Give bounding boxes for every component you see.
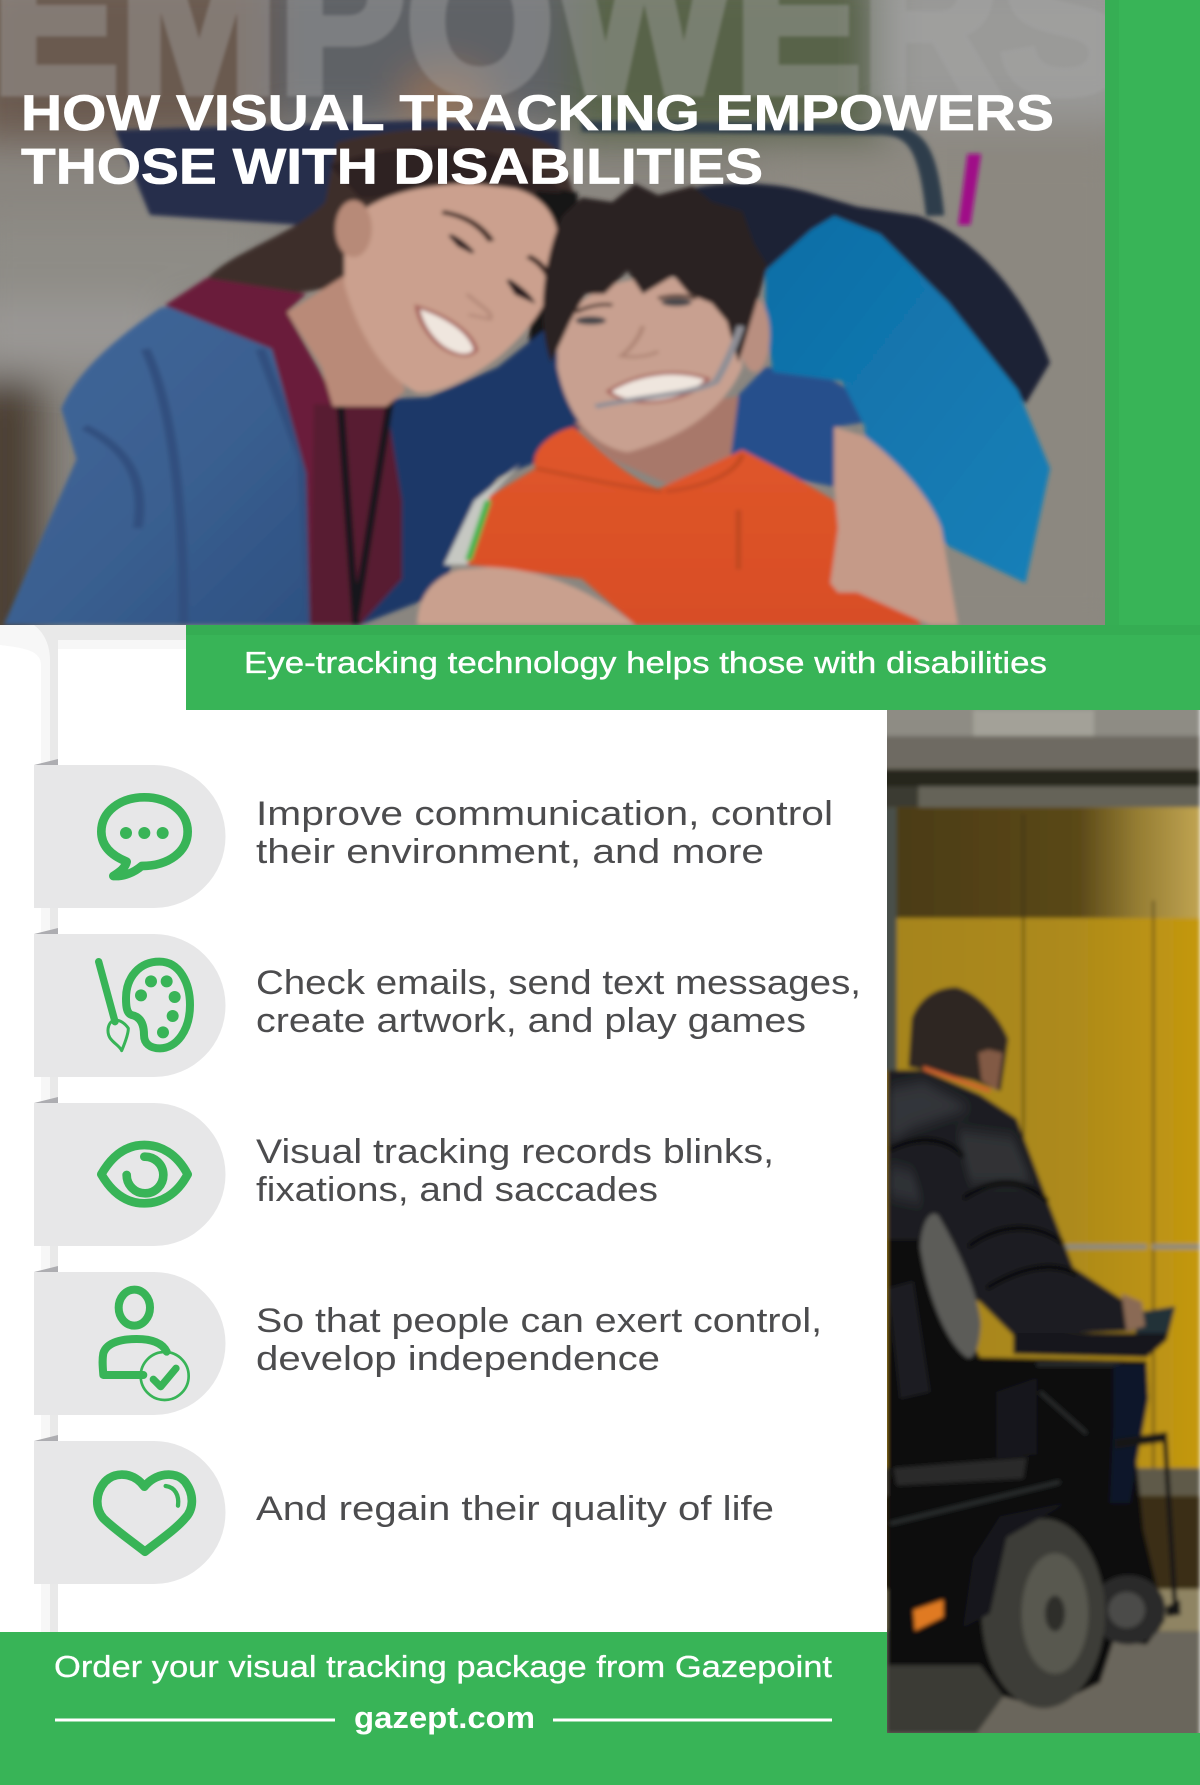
text: quality of life: And regain their quality of life — [256, 1490, 774, 1528]
wheelchair frame bar — [582, 126, 935, 216]
man head — [908, 987, 1008, 1091]
navy jacket front — [359, 328, 581, 625]
girl features — [442, 212, 551, 281]
title: HOW VISUAL TRACKING EMPOWERS — [21, 85, 1054, 141]
seat pad — [920, 1214, 981, 1358]
text: tracking: Visual tracking records blinks, — [256, 1133, 774, 1171]
text: activities — [256, 964, 861, 1040]
maroon hoodie — [164, 276, 334, 610]
text: communication: Improve communication, control — [256, 795, 833, 833]
subtitle band: Eye-tracking technology helps those with disabilities — [244, 645, 1047, 680]
headrest — [673, 183, 1050, 404]
rear wheels — [1091, 1575, 1166, 1645]
blue hoodie — [4, 301, 335, 625]
title — [21, 85, 1054, 194]
text: control: So that people can exert control, — [256, 1302, 822, 1340]
boy features — [576, 296, 696, 312]
icon: person with check — [103, 1290, 189, 1400]
icon: eye — [101, 1145, 188, 1203]
title: THOSE WITH DISABILITIES — [21, 138, 763, 194]
armrest and control — [1013, 1308, 1175, 1357]
footer url with rules: gazept.com — [354, 1700, 535, 1735]
list item 3 — [34, 1097, 774, 1246]
elevator interior — [887, 914, 1200, 1590]
text: tracking: fixations, and saccades — [256, 1171, 658, 1209]
navy background patch — [115, 120, 560, 225]
footer url with rules — [55, 1700, 832, 1735]
icon: speech bubble — [101, 797, 188, 876]
text: control — [256, 1302, 822, 1378]
text: communication — [256, 795, 833, 871]
boy face — [557, 277, 742, 452]
girl hair back — [201, 128, 576, 321]
jacket — [887, 1070, 1137, 1335]
text: control: develop independence — [256, 1340, 660, 1378]
subtitle band — [186, 625, 1200, 710]
hero photo: two smiling children with wheelchair — [0, 0, 1140, 660]
footer banner — [0, 1632, 1200, 1785]
teal blanket — [765, 216, 1050, 583]
right green column — [1105, 0, 1200, 710]
text: activities: Check emails, send text messages, — [256, 964, 861, 1002]
footer call to action: Order your visual tracking package from Gazepoint — [54, 1649, 832, 1684]
girl hand — [830, 427, 958, 625]
elevator photo: man in powered wheelchair — [880, 700, 1200, 1785]
girl face — [344, 184, 559, 393]
text: activities: create artwork, and play games — [256, 1002, 806, 1040]
wheelchair body — [887, 1240, 1165, 1708]
list item 5 — [34, 1435, 774, 1584]
boy hair — [543, 184, 768, 363]
icon: brush and palette — [99, 962, 190, 1051]
list item 1 — [34, 759, 833, 908]
icon: heart — [97, 1475, 192, 1552]
orange hoodie — [467, 427, 922, 625]
hero drop shadow and vertical ribbon — [0, 625, 186, 1632]
list item 2 — [34, 928, 861, 1077]
text: tracking — [256, 1133, 774, 1209]
text: communication: their environment, and more — [256, 833, 764, 871]
girl neck — [287, 276, 406, 406]
boy neck — [571, 394, 742, 485]
list item 4 — [34, 1266, 822, 1415]
girl sleeve — [731, 367, 865, 487]
